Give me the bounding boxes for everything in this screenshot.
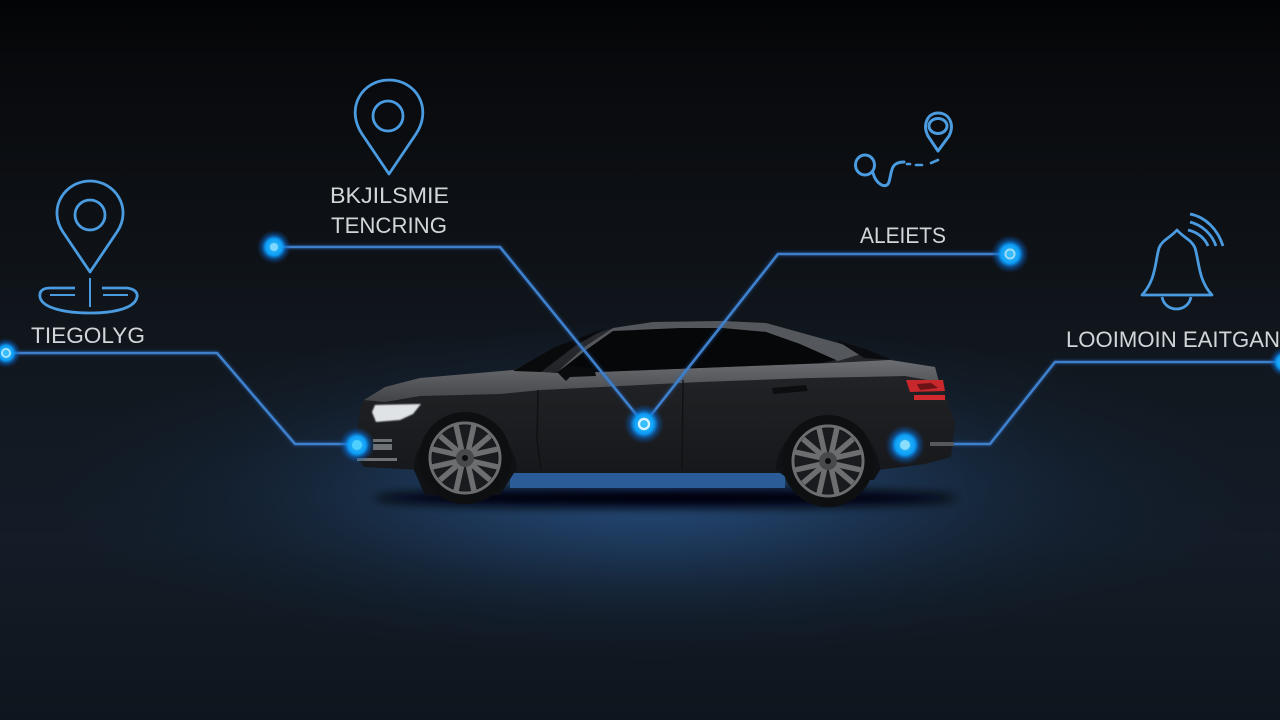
icon: bell with signal	[1142, 214, 1223, 309]
rear wheel	[776, 415, 880, 507]
connector: alerts	[644, 254, 1010, 424]
icon: route with pin	[856, 113, 951, 186]
rear bumper stub	[930, 442, 954, 446]
connector: tracking	[6, 353, 357, 444]
node: car door	[624, 404, 664, 444]
label: telematics: BKJILSMIE	[330, 183, 449, 208]
connector: telematics	[274, 247, 644, 424]
label: telematics	[330, 183, 449, 238]
door handle	[772, 385, 808, 394]
label: alerts: ALEIETS	[860, 223, 946, 248]
rear glass	[836, 340, 892, 360]
taillight	[906, 380, 945, 400]
hood and belt highlight	[364, 360, 939, 402]
label: telematics: TENCRING	[331, 213, 447, 238]
node: upper left	[257, 230, 291, 264]
node: left edge	[0, 338, 21, 368]
headlight	[372, 404, 421, 422]
icon: location pin on base	[40, 181, 137, 313]
windows	[513, 328, 892, 381]
roof highlight	[556, 321, 868, 373]
car body	[357, 321, 955, 473]
floor glow	[0, 250, 1280, 720]
label: location: LOOIMOIN EAITGAN	[1066, 327, 1280, 352]
node: right edge	[1269, 347, 1280, 377]
light strip under car	[510, 473, 785, 488]
connector: location	[954, 362, 1280, 444]
node: car rear	[885, 425, 925, 465]
car	[357, 321, 957, 508]
mirror	[557, 366, 596, 381]
node: car front	[339, 427, 375, 463]
front bumper details	[357, 439, 397, 461]
side window	[557, 328, 836, 373]
icon: location pin	[355, 80, 423, 174]
ground shadow	[373, 488, 957, 508]
front wheel	[414, 412, 517, 504]
label: tracking: TIEGOLYG	[31, 323, 145, 348]
door seams	[537, 380, 683, 470]
node: upper right	[991, 235, 1029, 273]
windshield	[513, 328, 606, 372]
